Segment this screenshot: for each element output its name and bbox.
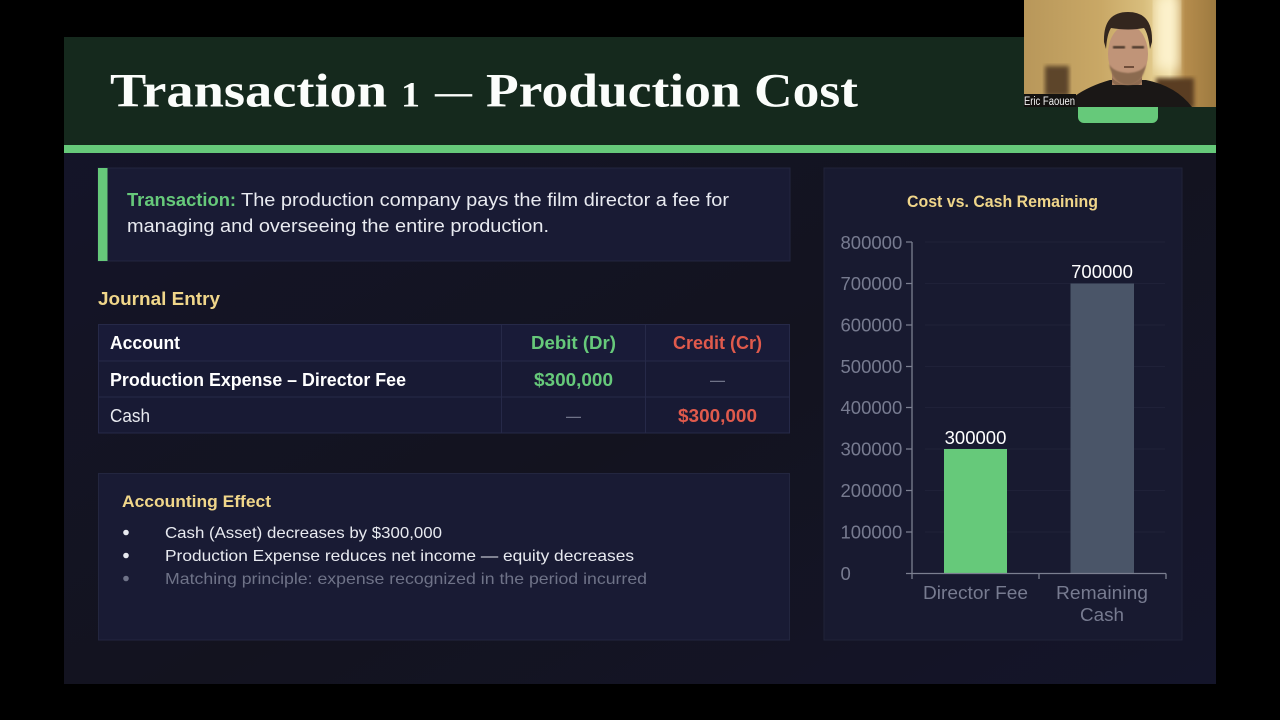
x axis: Director Fee	[923, 582, 1028, 603]
title: Production Cost	[486, 64, 858, 118]
y axis: 400000	[840, 397, 902, 418]
y axis: 300000	[840, 438, 902, 460]
table header row: Debit (Dr)	[531, 333, 616, 353]
bar: director fee	[944, 427, 1007, 573]
table row: cash: $300,000	[678, 406, 757, 426]
x axis: Remaining	[1056, 582, 1148, 603]
y axis: 500000	[840, 356, 902, 377]
green accent rule	[64, 145, 1216, 153]
heading: journal entry: Journal Entry	[98, 288, 221, 309]
green side bar	[98, 168, 108, 261]
title banner	[64, 37, 1216, 145]
bar: director fee: 300000	[945, 427, 1006, 448]
y axis: 700000	[840, 273, 902, 294]
x axis: Cash	[1080, 604, 1124, 625]
table row: cash: —	[566, 406, 581, 426]
y axis: 0	[840, 563, 851, 584]
y axis: 800000	[840, 232, 902, 253]
title: Transaction	[110, 64, 387, 118]
title	[110, 64, 858, 118]
panel: transaction description	[98, 168, 790, 261]
accounting effect heading: Accounting Effect	[122, 492, 271, 511]
transaction text: managing and overseeing the entire production.	[127, 216, 549, 236]
panel: bar chart	[824, 168, 1182, 640]
table header row: Account	[110, 333, 180, 353]
bullet list: Matching principle: expense recognized in the period incurred	[165, 571, 647, 588]
x axis	[912, 574, 1166, 625]
green tab under webcam	[1078, 107, 1158, 123]
transaction text	[127, 190, 729, 236]
table row: cash	[110, 406, 757, 426]
title: —	[434, 64, 473, 118]
webcam thumbnail	[1024, 0, 1216, 108]
bullet list: Cash (Asset) decreases by $300,000	[165, 525, 442, 542]
bar: remaining cash	[1070, 261, 1134, 573]
y axis: 100000	[840, 522, 902, 542]
transaction text: Transaction:	[127, 190, 236, 210]
table row: production expense: $300,000	[534, 370, 613, 390]
panel: accounting effect	[98, 474, 790, 640]
y axis	[840, 232, 912, 584]
y axis: 200000	[840, 480, 902, 501]
table row: cash: Cash	[110, 406, 150, 426]
title: 1	[401, 74, 420, 114]
journal entry table	[98, 324, 790, 433]
y axis: 600000	[840, 314, 902, 336]
table header row	[110, 333, 762, 353]
bullet list	[123, 525, 647, 588]
bar: remaining cash: 700000	[1071, 261, 1133, 282]
table row: production expense: —	[710, 370, 725, 390]
table row: production expense	[110, 370, 725, 390]
table header row: Credit (Cr)	[673, 333, 762, 353]
chart title: Cost vs. Cash Remaining	[907, 193, 1098, 211]
table row: production expense: Production Expense – Director Fee	[110, 370, 406, 390]
webcam name label: Eric Faouen	[1024, 96, 1075, 108]
gridlines	[925, 242, 1165, 532]
bullet list: Production Expense reduces net income — equity decreases	[165, 548, 634, 565]
transaction text: The production company pays the film director a fee for	[241, 190, 729, 210]
